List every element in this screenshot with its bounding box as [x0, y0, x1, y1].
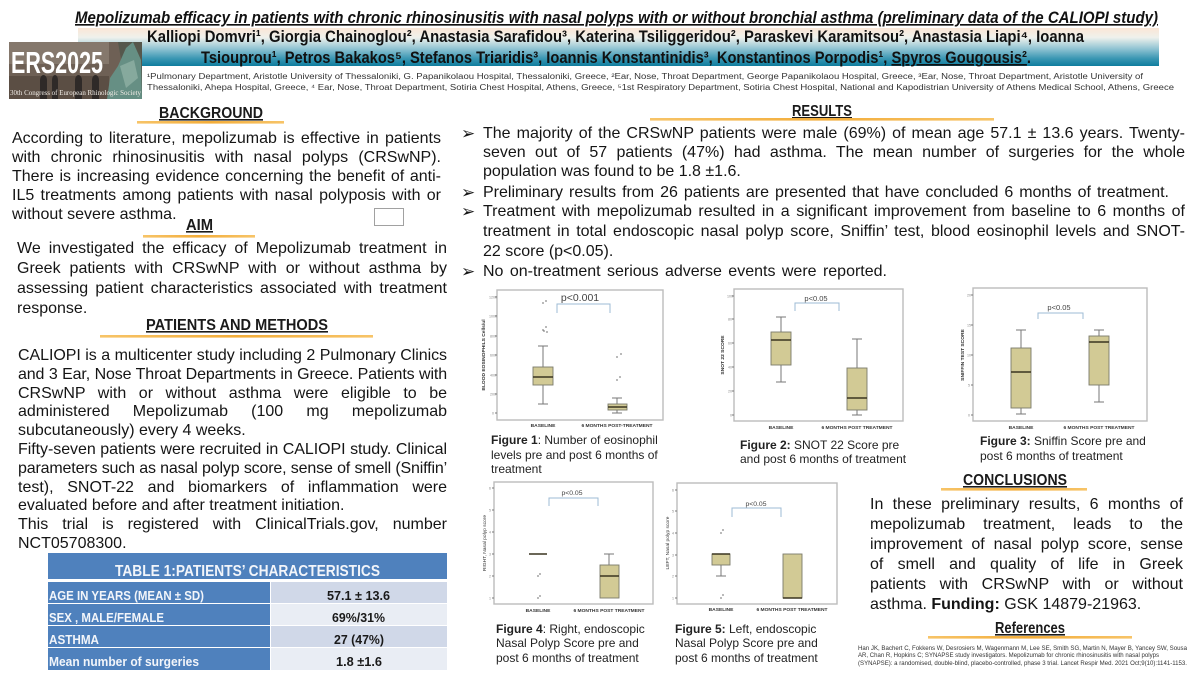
text: ➢ — [461, 262, 475, 282]
chart 2: SNOT 22 boxplot: 0 — [730, 414, 732, 418]
references text: AR, Chan R, Hopkins C; SYNAPSE study investigators. Mepolizumab for chronic rhinosinusitis with nasal polyps — [858, 652, 1160, 659]
text: results bullets: No on-treatment serious adverse events were reported. — [483, 263, 887, 280]
text: aim: Greek patients with CRSwNP with or without asthma by — [17, 260, 447, 277]
chart 5: left nasal polyp score boxplot: 6 — [672, 488, 674, 492]
chart 2: SNOT 22 boxplot: p<0.05 — [804, 294, 828, 303]
chart 1: blood eosinophils boxplot: BLOOD EOSINOPHILS Cells/ul — [481, 319, 487, 391]
chart 1: blood eosinophils boxplot: 6 MONTHS POST-TREATMENT — [581, 423, 653, 429]
chart 3: sniffin test boxplot: 6 MONTHS POST TREATMENT — [1063, 425, 1135, 431]
text: patients and methods — [18, 347, 447, 552]
chart 1: blood eosinophils boxplot: 800 — [490, 334, 496, 338]
figure 5 caption: Left, endoscopic — [726, 622, 816, 636]
table: patients characteristics: AGE IN YEARS (MEAN ± SD) — [49, 589, 204, 603]
chart 5: left nasal polyp score boxplot: BASELINE — [709, 607, 734, 613]
text: background: IL5 treatments among patients with nasal polyposis with or — [12, 187, 441, 204]
chart 3: sniffin test boxplot: 0 — [968, 414, 970, 418]
chart 1: blood eosinophils boxplot: 0 — [492, 412, 494, 416]
chart 5: left nasal polyp score boxplot: 3 — [672, 554, 674, 558]
references text — [858, 645, 1187, 667]
text: background: without severe asthma. — [12, 206, 177, 223]
figure 3 caption: Figure 3: — [980, 434, 1031, 448]
text: conclusions: In these preliminary results, 6 months of — [870, 496, 1183, 513]
heading: references: References — [995, 620, 1065, 637]
figure 3 caption: post 6 months of treatment — [980, 449, 1123, 463]
chart 5: left nasal polyp score boxplot: 2 — [672, 574, 674, 578]
text: background: with chronic rhinosinusitis with nasal polyps (CRSwNP). — [12, 149, 441, 166]
chart 4: right nasal polyp score boxplot: 2 — [489, 574, 491, 578]
affiliations: Thessaloniki, Ahepa Hospital, Greece, ⁴ Ear, Nose, Throat Department, Sotiria Chest Hospital, Athens, Greece, ⁵1st Respiratory Department, Sotiria Chest Hospital, National and Kapodistrian University of Athens Medical School, Athens, Greece — [147, 83, 1175, 92]
table: patients characteristics: SEX , MALE/FEMALE — [49, 611, 164, 625]
chart 5: left nasal polyp score boxplot: p<0.05 — [746, 501, 767, 508]
chart 5: left nasal polyp score boxplot: LEFT, Nasal polyp score — [665, 516, 671, 570]
heading: aim — [143, 217, 255, 238]
text: conclusions: improvement of nasal polyp score, sense — [870, 536, 1183, 553]
figure 4 caption: Figure 4 — [496, 622, 543, 636]
figure 3 caption: Sniffin Score pre and — [1031, 434, 1146, 448]
chart 4: right nasal polyp score boxplot: 5 — [489, 508, 491, 512]
text: aim: response. — [17, 300, 87, 317]
table: patients characteristics: 57.1 ± 13.6 — [327, 589, 390, 603]
table: patients characteristics: ASTHMA — [49, 633, 99, 647]
text: conclusions: patients with CRSwNP with or without — [870, 576, 1183, 593]
chart 2: SNOT 22 boxplot: 60 — [728, 342, 732, 346]
text: results bullets: Preliminary results from 26 patients are presented that have concluded 6 months of treatment. — [483, 184, 1169, 201]
text: results bullets: Treatment with mepolizumab resulted in a significant improvement from baseline to 6 months of — [483, 203, 1185, 220]
table: patients characteristics — [48, 553, 447, 670]
figure 4 caption: Nasal Polyp Score pre and — [496, 636, 639, 650]
chart 3: sniffin test boxplot — [960, 288, 1147, 431]
text: results bullets — [461, 124, 1185, 282]
logo: ERS2025: 30th Congress of European Rhinologic Society — [10, 88, 141, 97]
chart 2: SNOT 22 boxplot: BASELINE — [769, 425, 794, 431]
heading: patients and methods: PATIENTS AND METHODS — [146, 317, 328, 334]
chart 5: left nasal polyp score boxplot: 1 — [672, 596, 674, 600]
figure 4 caption: : Right, endoscopic — [543, 622, 645, 636]
text: conclusions: mepolizumab treatment, leads to the — [870, 516, 1183, 533]
small empty box — [374, 208, 404, 226]
chart 5: left nasal polyp score boxplot: 4 — [672, 532, 674, 536]
chart 4: right nasal polyp score boxplot: 6 MONTHS POST TREATMENT — [573, 608, 645, 614]
figure 5 caption: Figure 5: — [675, 622, 726, 636]
heading: background: BACKGROUND — [159, 105, 263, 122]
chart 1: blood eosinophils boxplot: 200 — [490, 392, 496, 396]
chart 2: SNOT 22 boxplot: 80 — [728, 318, 732, 322]
chart 5: left nasal polyp score boxplot — [665, 483, 837, 613]
chart 1: blood eosinophils boxplot: p<0.001 — [561, 292, 599, 304]
text: patients and methods: administered Mepolizumab (100 mg mepolizumab — [18, 403, 447, 420]
text: patients and methods: and 3 Ear, Nose Throat Departments in Greece. Patients with — [18, 366, 447, 383]
chart 1: blood eosinophils boxplot: 400 — [490, 374, 496, 378]
authors: Kalliopi Domvri¹, Giorgia Chainoglou², Anastasia Sarafidou³, Katerina Tsiliggeridou², Paraskevi Karamitsou², Anastasia Liapi⁴, Ioanna — [147, 27, 1084, 46]
text: conclusions: asthma. Funding: GSK 14879-21963. — [870, 596, 1141, 613]
table: patients characteristics: 27 (47%) — [334, 633, 384, 647]
references text: (SYNAPSE): a randomised, double-blind, placebo-controlled, phase 3 trial. Lancet Respir Med. 2021 Oct;9(10):1141-1153. — [858, 660, 1187, 667]
text: patients and methods: NCT05708300. — [18, 535, 127, 552]
chart 3: sniffin test boxplot: SNIFFIN TEST SCORE — [960, 328, 966, 381]
logo: ERS2025 — [9, 42, 142, 99]
chart 2: SNOT 22 boxplot: 6 MONTHS POST TREATMENT — [821, 425, 893, 431]
text: conclusions: of smell and quality of life in Greek — [870, 556, 1183, 573]
chart 2: SNOT 22 boxplot: SNOT 22 SCORE — [720, 335, 726, 375]
chart 4: right nasal polyp score boxplot: 1 — [489, 596, 491, 600]
figure 1 caption: : Number of eosinophil — [538, 433, 658, 447]
text: ➢ — [461, 124, 475, 144]
chart 1: blood eosinophils boxplot: 1200 — [489, 296, 497, 300]
chart 3: sniffin test boxplot: p<0.05 — [1047, 303, 1071, 312]
figure 1 caption: levels pre and post 6 months of — [491, 448, 658, 462]
text: results bullets: treatment in total endoscopic nasal polyp score, Sniffin’ test, blood eosinophil levels and SNOT- — [483, 223, 1185, 240]
references text: Han JK, Bachert C, Fokkens W, Desrosiers M, Wagenmann M, Lee SE, Smith SG, Martin N, Mayer B, Yancey SW, Sousa — [858, 645, 1187, 652]
chart 4: right nasal polyp score boxplot: 6 — [489, 486, 491, 490]
text: background: According to literature, mepolizumab is effective in patients — [12, 130, 441, 147]
chart 4: right nasal polyp score boxplot: RIGHT, Nasal polyp score — [482, 515, 488, 571]
text: results bullets: The majority of the CRSwNP patients were male (69%) of mean age 57.1 ± 13.6 years. Twenty- — [483, 125, 1185, 142]
text: background — [12, 130, 441, 223]
table: patients characteristics: Mean number of surgeries — [49, 655, 199, 669]
figure 1 caption: Figure 1 — [491, 433, 538, 447]
text: results bullets: seven out of 57 patients (47%) had asthma. The mean number of surgeries for the whole — [483, 144, 1185, 161]
table: patients characteristics: 1.8 ±1.6 — [336, 655, 382, 669]
chart 1: blood eosinophils boxplot: 600 — [490, 354, 496, 358]
chart 3: sniffin test boxplot: 10 — [967, 354, 971, 358]
chart 5: left nasal polyp score boxplot: 5 — [672, 510, 674, 514]
authors: Tsiouprou¹, Petros Bakakos⁵, Stefanos Triaridis³, Ioannis Konstantinidis³, Konstantinos Porpodis¹, Spyros Gougousis². — [201, 48, 1031, 67]
chart 3: sniffin test boxplot: 5 — [968, 384, 970, 388]
table: patients characteristics: 69%/31% — [332, 611, 385, 625]
chart 2: SNOT 22 boxplot: 40 — [728, 366, 732, 370]
heading: aim: AIM — [186, 217, 213, 234]
chart 4: right nasal polyp score boxplot — [482, 482, 653, 614]
text: aim: We investigated the efficacy of Mepolizumab treatment in — [17, 240, 447, 257]
affiliations: ¹Pulmonary Department, Aristotle University of Thessaloniki, G. Papanikolaou Hospital, Thessaloniki, Greece, ²Ear, Nose, Throat Department, George Papanikolaou Hospital, Greece, ³Ear, Nose, Throat Department, Aristotle University of — [147, 72, 1144, 81]
chart 4: right nasal polyp score boxplot: 3 — [489, 552, 491, 556]
text: aim: assessing patient characteristics associated with treatment — [17, 280, 447, 297]
chart 1: blood eosinophils boxplot — [481, 290, 663, 429]
figure 2 caption: SNOT 22 Score pre — [791, 438, 899, 452]
figure 5 caption: post 6 months of treatment — [675, 651, 818, 665]
chart 1: blood eosinophils boxplot: BASELINE — [531, 423, 556, 429]
text: patients and methods: CRSwNP with or without asthma were eligible to be — [18, 385, 447, 402]
text: patients and methods: subcutaneously) every 4 weeks. — [18, 422, 246, 439]
affiliations — [147, 72, 1175, 92]
text: patients and methods: parameters such as nasal polyp score, sense of smell (Sniffin’ — [18, 460, 447, 477]
chart 3: sniffin test boxplot: 15 — [967, 324, 971, 328]
text: results bullets: population was found to be 1.8 ±1.6. — [483, 163, 741, 180]
text: patients and methods: This trial is registered with ClinicalTrials.gov, number — [18, 516, 447, 533]
figure 1 caption: treatment — [491, 462, 542, 476]
header banner — [78, 28, 1159, 66]
figure 4 caption: post 6 months of treatment — [496, 651, 639, 665]
text: patients and methods: Fifty-seven patients were recruited in CALIOPI study. Clinical — [18, 441, 447, 458]
chart 4: right nasal polyp score boxplot: p<0.05 — [562, 490, 583, 497]
figure 2 caption: Figure 2: — [740, 438, 791, 452]
table: patients characteristics: TABLE 1:PATIENTS’ CHARACTERISTICS — [115, 563, 380, 580]
figure 2 caption: and post 6 months of treatment — [740, 452, 907, 466]
text: aim — [17, 240, 447, 317]
heading: results: RESULTS — [792, 103, 852, 120]
chart 2: SNOT 22 boxplot — [720, 289, 903, 431]
text: patients and methods: evaluated before and after treatment initiation. — [18, 497, 344, 514]
text: ➢ — [461, 183, 475, 203]
chart 5: left nasal polyp score boxplot: 6 MONTHS POST TREATMENT — [756, 607, 828, 613]
text: ➢ — [461, 202, 475, 222]
text: conclusions — [870, 496, 1183, 613]
text: patients and methods: CALIOPI is a multicenter study including 2 Pulmonary Clinics — [18, 347, 447, 364]
chart 4: right nasal polyp score boxplot: 4 — [489, 530, 491, 534]
logo: ERS2025: ERS2025 — [11, 45, 103, 80]
text: background: There is increasing evidence concerning the benefit of anti- — [12, 168, 441, 185]
text: results bullets: 22 score (p<0.05). — [483, 243, 613, 260]
chart 4: right nasal polyp score boxplot: BASELINE — [526, 608, 551, 614]
heading: conclusions: CONCLUSIONS — [963, 472, 1067, 489]
chart 2: SNOT 22 boxplot: 100 — [727, 294, 733, 298]
text: patients and methods: test), SNOT-22 and biomarkers of inflammation were — [18, 479, 447, 496]
chart 3: sniffin test boxplot: 20 — [967, 294, 971, 298]
chart 2: SNOT 22 boxplot: 20 — [728, 390, 732, 394]
chart 1: blood eosinophils boxplot: 1000 — [489, 314, 497, 318]
authors — [147, 27, 1084, 67]
figure 5 caption: Nasal Polyp Score pre and — [675, 636, 818, 650]
chart 3: sniffin test boxplot: BASELINE — [1009, 425, 1034, 431]
